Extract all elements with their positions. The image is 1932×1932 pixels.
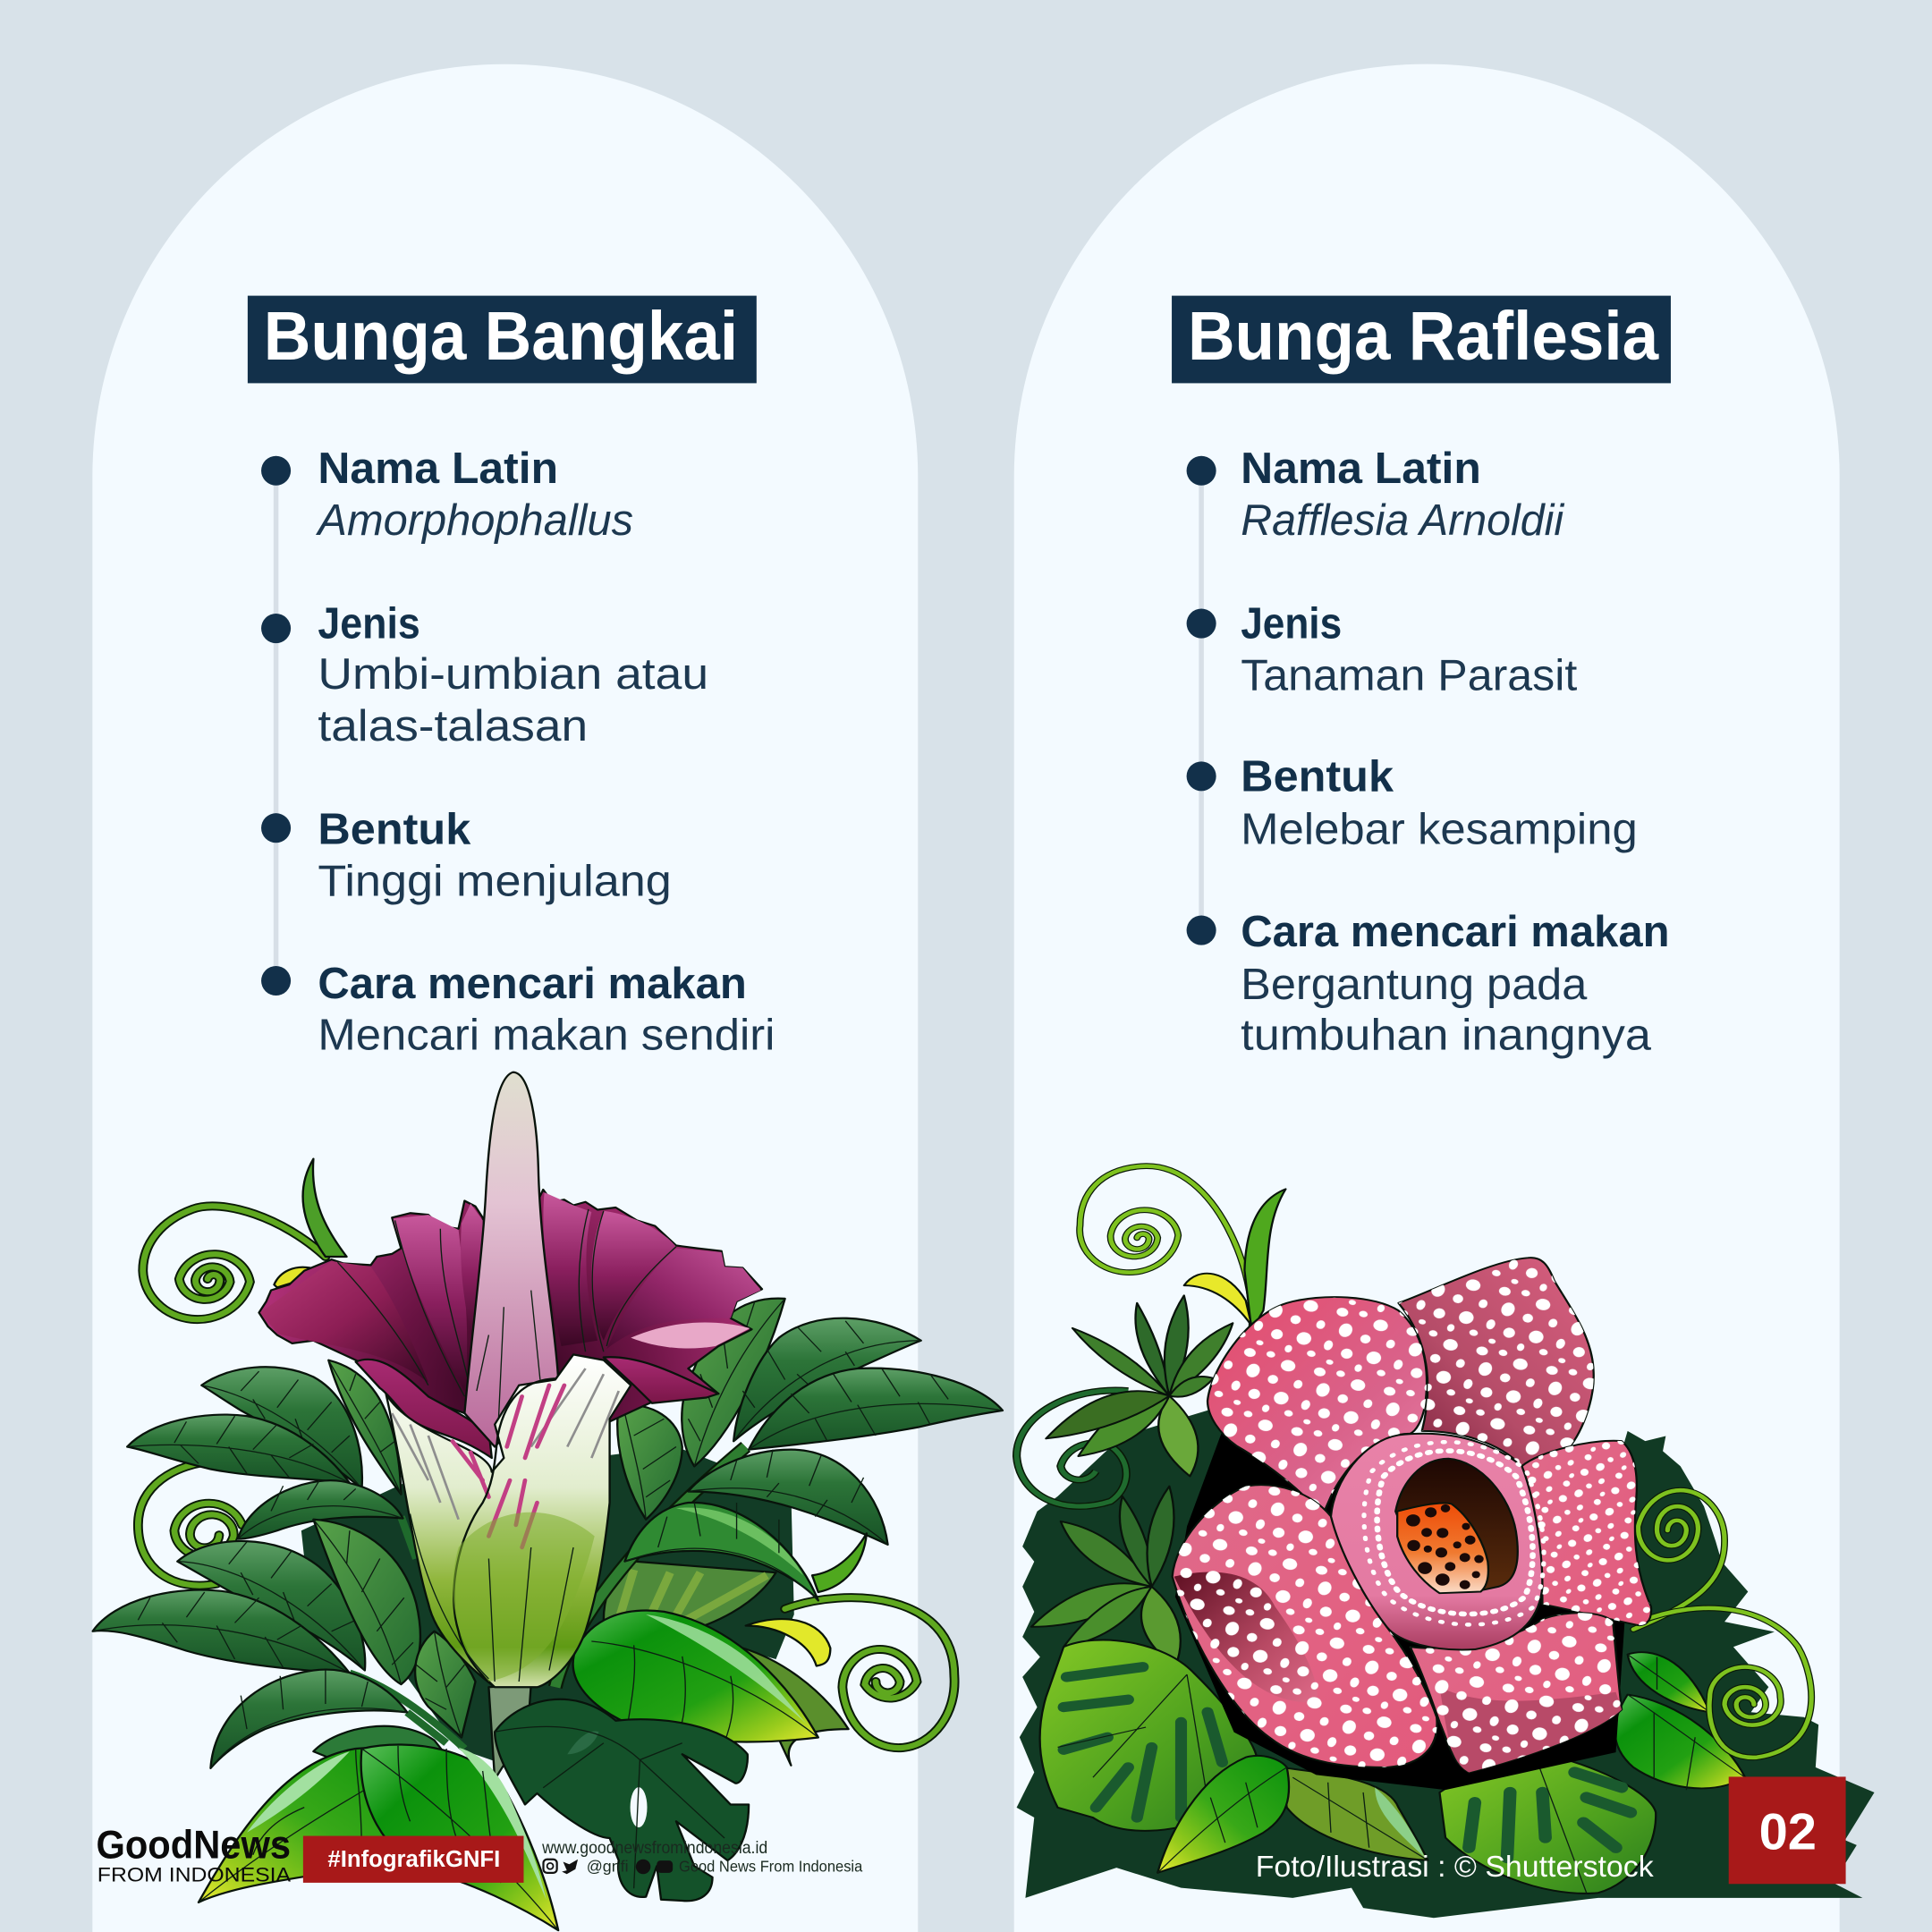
leaf: upright right back [682,1299,785,1466]
leaf: small dark behind bottom leaves [313,1726,459,1771]
leaf: bright bottom left [1157,1756,1289,1873]
logo: GoodNews From Indonesia: GoodNews [96,1823,291,1867]
flower: front lip ruffle [356,1357,718,1458]
text block: Bunga Bangkai facts: Jenis [318,598,420,648]
footer website and social handles: www.goodnewsfromindonesia.id [541,1839,767,1858]
text block: Bunga Raflesia facts [1241,443,1670,1060]
leaf: left F [238,1480,402,1539]
stem: curved main stalk [555,1447,746,1687]
petal: right [1521,1441,1651,1625]
leaf: right M [625,1503,818,1600]
flower: central spadix [464,1072,558,1447]
text block: Bunga Bangkai facts: Amorphophallus [315,495,633,545]
leaf: yellow curl [746,1533,867,1666]
leaf: left monstera [1040,1640,1258,1831]
hashtag badge [303,1836,523,1883]
palm leaf cluster: upper [1046,1295,1233,1476]
text block: Bunga Raflesia facts: Melebar kesamping [1241,804,1638,854]
text block: Bunga Raflesia facts: Bentuk [1241,750,1394,801]
petal: top left [1208,1297,1427,1516]
flower: corpse flower spathe back [259,1072,762,1687]
small leaves near tendril [274,1159,347,1287]
leaf: bright bottom left [199,1748,435,1902]
leaf: back Q [731,1648,849,1766]
illustration: Bunga Bangkai with foliage [93,1072,1003,1930]
flower: ruffle petals [260,1192,761,1396]
flower throat opening [1395,1459,1518,1592]
logo: GoodNews From Indonesia [96,1823,291,1886]
panel: Bunga Bangkai arch [92,64,918,1932]
text block: Bunga Bangkai facts: Cara mencari makan [318,958,747,1008]
tendril: top left spiral [1080,1166,1252,1331]
leaf: right L [688,1450,888,1545]
orange disc with dots [1397,1504,1488,1593]
striped background leaf [604,1562,775,1634]
text block: Bunga Raflesia facts: Bergantung pada [1241,959,1588,1009]
leaf: bottom center [1281,1767,1428,1860]
timeline: Bunga Bangkai facts [261,456,291,996]
text block: Bunga Bangkai facts [315,443,775,1060]
text block: Bunga Raflesia facts: Cara mencari makan [1241,906,1670,956]
leaf: bright right [1615,1695,1745,1790]
page number badge [1729,1776,1846,1884]
footer website and social handles: Good News From Indonesia [679,1857,862,1875]
dark foliage backdrop [1017,1406,1875,1918]
leaf: upright G [313,1520,420,1684]
petal: top right [1399,1258,1594,1466]
text block: Bunga Raflesia facts: Tanaman Parasit [1241,649,1577,699]
flower: rafflesia [1173,1258,1651,1773]
petal: bottom [1411,1613,1622,1773]
tendril: right upper spiral [1633,1490,1724,1630]
leaf: bottom monstera [1439,1757,1656,1894]
photo credit: Foto/Ilustrasi : © Shutterstock [1256,1851,1654,1884]
text block: Bunga Raflesia facts: Jenis [1241,598,1342,648]
heading: Bunga Raflesia: Bunga Raflesia [1188,298,1659,375]
footer website and social handles: @gnfi [587,1857,629,1875]
tendril: upper left spiral [143,1206,326,1319]
text block: Bunga Bangkai facts: Umbi-umbian atau [318,648,708,699]
flower centre ring [1331,1434,1544,1649]
leaf: right K [749,1368,1003,1450]
panel: Bunga Raflesia arch [1014,64,1840,1932]
text block: Bunga Raflesia facts: tumbuhan inangnya [1241,1010,1651,1060]
leaf: right J [733,1318,921,1441]
stem: left leaf stalks [350,1517,464,1749]
leaf: small right [1628,1652,1710,1712]
illustration: Rafflesia with foliage [1017,1166,1875,1918]
text block: Bunga Raflesia facts: Rafflesia Arnoldii [1241,495,1565,545]
palm leaf cluster: lower [1031,1487,1181,1667]
leaf: left E [210,1670,407,1768]
leaf: left B [127,1415,350,1483]
leaf: left D [177,1541,365,1671]
tendril: lower left spiral [138,1461,242,1586]
text block: Bunga Bangkai facts: Bentuk [318,804,471,854]
heading: Bunga Bangkai: Bunga Bangkai [264,298,738,375]
text block: Bunga Bangkai facts: talas-talasan [318,700,588,750]
text block: Bunga Raflesia facts: Nama Latin [1241,443,1481,493]
leaf: upright left back [328,1360,401,1495]
timeline: Bunga Raflesia facts [1187,456,1216,945]
page number badge: 02 [1759,1804,1817,1861]
text block: Bunga Bangkai facts: Tinggi menjulang [318,855,672,905]
tendril: dark left spiral [1017,1390,1128,1506]
leaf: upper left A [201,1367,362,1488]
text block: Bunga Bangkai facts: Mencari makan sendiri [318,1010,775,1060]
leaf: top sprout [1184,1189,1285,1331]
dark foliage backdrop [301,1447,794,1783]
leaf: bright green P [573,1611,818,1742]
flower shadow [1175,1431,1624,1790]
leaf: dark monstera [495,1699,749,1901]
logo: GoodNews From Indonesia: FROM INDONESIA [97,1864,291,1886]
text block: Bunga Bangkai facts: Nama Latin [318,443,558,493]
hashtag badge: #InfografikGNFI [327,1845,500,1872]
tendril: right lower spiral [1640,1608,1811,1758]
stem: grey flower stalk [488,1684,531,1779]
petal: left [1173,1485,1437,1767]
flower: white and green spathe cup [386,1354,631,1687]
leaf: left C [93,1590,350,1674]
footer website and social handles [541,1839,862,1875]
leaf: small center [415,1631,476,1738]
tendril: right spiral [785,1597,954,1748]
leaf: right small O [617,1404,682,1520]
leaf: bright bottom right [361,1744,558,1930]
